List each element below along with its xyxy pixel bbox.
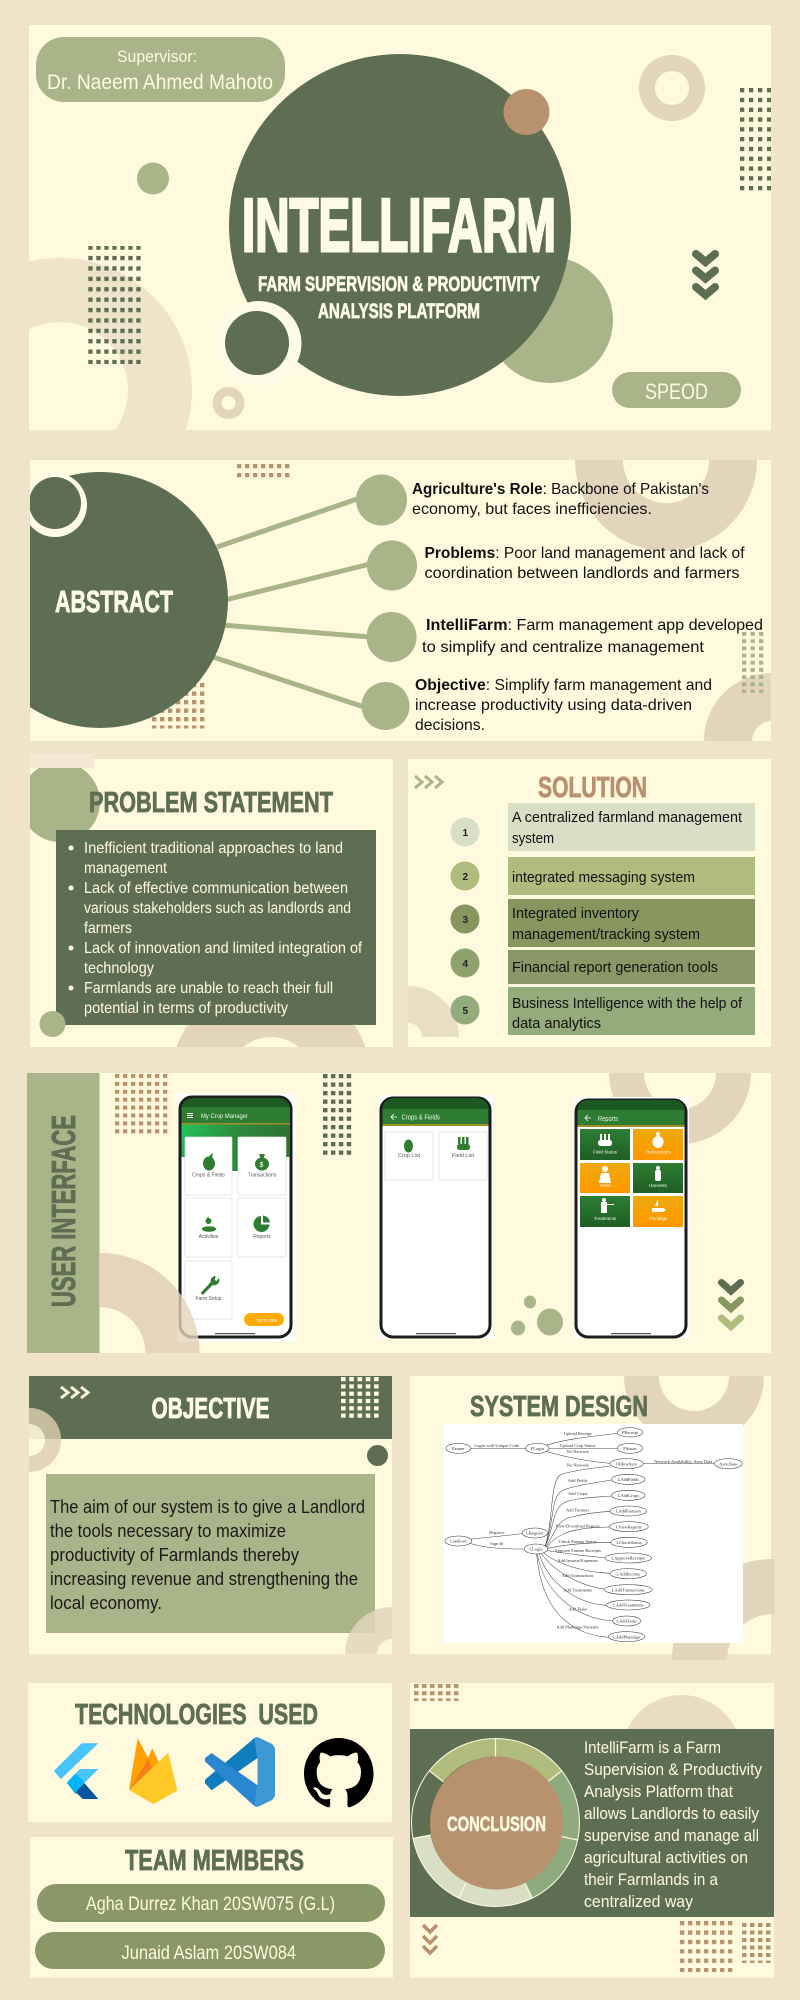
- abstract heading: ABSTRACT: [55, 584, 173, 619]
- item 2: integrated messaging system: [512, 869, 695, 886]
- system flow diagram: Upload Receipt: [564, 1431, 592, 1436]
- text: intellifarm: [422, 617, 763, 656]
- system flow diagram: LAddTasks: [616, 1619, 637, 1624]
- abstract circle: [30, 472, 228, 728]
- system flow diagram: Add Crops: [568, 1491, 588, 1496]
- bullet list box: farmers: [84, 920, 132, 937]
- item 3: [450, 899, 755, 947]
- system flow diagram: Add Plantings/Varieties: [556, 1625, 599, 1630]
- text: agriculture's role: [412, 481, 709, 518]
- conclusion text: centralized way: [584, 1892, 693, 1911]
- bullet list box: Lack of effective communication between: [84, 880, 348, 897]
- item 1: A centralized farmland management: [512, 809, 743, 826]
- text: agriculture's role: economy, but faces inefficiencies.: [412, 501, 652, 518]
- system flow diagram: OfflineSync: [616, 1461, 638, 1466]
- item 2: 2: [462, 872, 468, 883]
- system flow diagram: LAddFarmers: [616, 1509, 641, 1514]
- chevrons: [415, 776, 442, 788]
- chevrons: [696, 254, 715, 295]
- sage dots cluster: [511, 1296, 563, 1336]
- system flow diagram: LRegister: [526, 1531, 544, 1536]
- system flow diagram: LAddCrops: [618, 1493, 639, 1498]
- bullet list box: Lack of innovation and limited integration of: [84, 940, 363, 957]
- panel: abstract: [30, 460, 771, 741]
- objective text box: [46, 1474, 375, 1633]
- subtitle: ANALYSIS PLATFORM: [318, 300, 480, 323]
- item 5: data analytics: [512, 1015, 601, 1032]
- text: problems: [424, 545, 745, 582]
- heading: SYSTEM DESIGN: [470, 1391, 648, 1423]
- item 3: management/tracking system: [512, 926, 700, 943]
- system flow diagram: Approve Farmer Receipts: [554, 1548, 601, 1553]
- conclusion text: agricultural activities on: [584, 1848, 748, 1867]
- system flow diagram: Add Fields: [568, 1478, 588, 1483]
- system flow diagram: LAddPlantings: [613, 1634, 640, 1639]
- ringed dark circle: [216, 301, 302, 386]
- phone 3: reports: Transactions: [645, 1150, 672, 1154]
- phone 1: my crop manager: My Crop Manager: [201, 1113, 249, 1120]
- dark oval: [367, 1445, 388, 1466]
- phone 3: reports: Harvests: [649, 1183, 668, 1188]
- bullet list box: various stakeholders such as landlords and: [84, 900, 351, 917]
- system flow diagram: Sign In: [490, 1541, 504, 1546]
- system flow diagram: No Network: [567, 1462, 590, 1467]
- item 1: system: [512, 830, 554, 847]
- phone 1: my crop manager: $: [260, 1162, 264, 1169]
- system flow diagram: Network Availability, Sync Data: [654, 1459, 712, 1465]
- tan arch over phone: [99, 1253, 199, 1342]
- side strip with vertical heading: [27, 1073, 100, 1353]
- system flow diagram: LAddTreatments: [613, 1603, 644, 1608]
- phone 3: reports: Field Status: [593, 1150, 618, 1154]
- item 5: 5: [462, 1006, 468, 1017]
- conclusion text: IntelliFarm is a Farm: [584, 1738, 721, 1757]
- objective text box: local economy.: [50, 1593, 162, 1613]
- panel: team members: [30, 1837, 393, 1978]
- phone 3: reports: Reports: [598, 1116, 618, 1123]
- icon: vs code: [205, 1737, 275, 1807]
- panel: technologies used: [28, 1683, 392, 1822]
- item 1: [450, 803, 755, 851]
- conclusion heading: CONCLUSION: [447, 1813, 546, 1836]
- panel: objective: [29, 1376, 392, 1654]
- phone 3: reports: Tasks: [599, 1183, 611, 1188]
- item 4: 4: [462, 959, 468, 970]
- connector lines: [213, 498, 370, 707]
- system flow diagram: LLogin: [529, 1547, 543, 1552]
- panel: user interface: [27, 1073, 771, 1353]
- item 4: Financial report generation tools: [512, 959, 718, 976]
- phone 2: crops and fields: Field List: [452, 1153, 474, 1159]
- conclusion text: supervise and manage all: [584, 1826, 759, 1845]
- diagram image area: [444, 1424, 743, 1643]
- conclusion text: Analysis Platform that: [584, 1782, 733, 1801]
- system flow diagram: Add Transactions: [562, 1573, 594, 1578]
- system flow diagram: Add Income/Expenses: [557, 1558, 598, 1563]
- phone 1: my crop manager: Reports: [253, 1234, 271, 1240]
- phone 1: my crop manager: [177, 1093, 296, 1342]
- system flow diagram: LAddFields: [618, 1477, 639, 1482]
- text: intellifarm: to simplify and centralize management: [422, 639, 705, 656]
- chevrons: [722, 1282, 740, 1326]
- phone 1: my crop manager: Crops & Fields: [192, 1172, 225, 1178]
- system flow diagram: Check Farmer Status: [559, 1539, 597, 1544]
- system flow diagram: Add Tasks: [568, 1607, 587, 1612]
- sage corner circle: [30, 768, 100, 842]
- small sage circle: [137, 162, 169, 194]
- item 3: Integrated inventory: [512, 905, 639, 922]
- text: objective: [415, 677, 712, 734]
- objective text box: increasing revenue and strengthening the: [50, 1569, 358, 1589]
- panel: problem statement: [30, 759, 393, 1047]
- system flow diagram: [445, 1428, 742, 1642]
- side strip with vertical heading: USER INTERFACE: [45, 1115, 82, 1307]
- phone 2: crops and fields: [378, 1095, 493, 1339]
- system flow diagram: SyncData: [720, 1461, 737, 1466]
- panel: conclusion: [410, 1683, 774, 1978]
- conclusion text: Supervision & Productivity: [584, 1760, 762, 1779]
- objective text box: The aim of our system is to give a Landlord: [50, 1497, 365, 1517]
- system flow diagram: Login with Unique Code: [474, 1443, 519, 1448]
- system flow diagram: FLogin: [531, 1446, 545, 1451]
- subtitle: FARM SUPERVISION & PRODUCTIVITY: [258, 273, 540, 296]
- heading: TECHNOLOGIES USED: [75, 1699, 318, 1731]
- text: objective: Objective: Simplify farm management and: [415, 677, 712, 694]
- text: agriculture's role: Agriculture's Role: Backbone of Pakistan's: [412, 481, 709, 498]
- item 5: Business Intelligence with the help of: [512, 995, 743, 1012]
- tan circle: [504, 89, 550, 135]
- SPEOD pill: [612, 372, 741, 408]
- bullet list box: [56, 830, 376, 1025]
- decorative ring top right: [647, 63, 697, 113]
- system flow diagram: No Network: [567, 1449, 590, 1454]
- SPEOD pill: SPEOD: [645, 379, 708, 404]
- item 2: [450, 857, 755, 895]
- icon: github: [304, 1738, 374, 1807]
- conclusion text: allows Landlords to easily: [584, 1804, 759, 1823]
- tan ring: [29, 1408, 61, 1472]
- supervisor pill: Supervisor:: [117, 47, 197, 66]
- member pill 1: Agha Durrez Khan 20SW075 (G.L): [86, 1894, 335, 1915]
- system flow diagram: LViewReports: [616, 1524, 642, 1529]
- icon: firebase: [129, 1738, 177, 1804]
- sage circle behind main: [487, 257, 613, 383]
- system flow diagram: LCheckStatus: [616, 1540, 642, 1545]
- bullet list box: management: [84, 860, 168, 877]
- objective text box: productivity of Farmlands thereby: [50, 1545, 299, 1565]
- subtitle: [258, 273, 540, 323]
- node circles: [356, 474, 417, 730]
- small sage circle: [40, 1011, 66, 1037]
- bullet list box: Inefficient traditional approaches to land: [84, 840, 343, 857]
- system flow diagram: LApproveReceipts: [611, 1556, 646, 1561]
- member pill 2: Junaid Aslam 20SW084: [122, 1943, 296, 1964]
- phone 1: my crop manager: Farm Setup: [195, 1296, 222, 1302]
- system flow diagram: FReceipt: [622, 1430, 639, 1435]
- bullet list box: potential in terms of productivity: [84, 1000, 288, 1017]
- conclusion text: [584, 1738, 762, 1911]
- header band: [29, 1376, 392, 1439]
- system flow diagram: Landlord: [450, 1539, 467, 1544]
- chevrons: [423, 1925, 437, 1953]
- system flow diagram: LAddIncome: [616, 1571, 640, 1576]
- system flow diagram: View/Download Reports: [555, 1524, 600, 1529]
- panel: solution: [408, 759, 771, 1047]
- bullet list box: technology: [84, 960, 154, 977]
- dark band: [410, 1729, 774, 1917]
- item 3: 3: [462, 915, 468, 926]
- conclusion text: their Farmlands in a: [584, 1870, 718, 1889]
- phone 3: reports: Treatments: [594, 1216, 617, 1221]
- segmented ring: [412, 1738, 580, 1906]
- heading: SOLUTION: [538, 772, 647, 804]
- system flow diagram: Add Farmers: [566, 1508, 590, 1513]
- item 4: [450, 948, 755, 984]
- panel: system design: [410, 1376, 775, 1660]
- text: problems: coordination between landlords and farmers: [424, 565, 740, 582]
- heading: TEAM MEMBERS: [125, 1845, 304, 1877]
- item 1: 1: [462, 828, 468, 839]
- system flow diagram: Add Treatments: [563, 1588, 592, 1593]
- text: intellifarm: IntelliFarm: Farm management app developed: [426, 617, 763, 634]
- system flow diagram: LAddTransactions: [612, 1587, 645, 1592]
- heading: PROBLEM STATEMENT: [89, 787, 333, 819]
- text: objective: decisions.: [415, 717, 485, 734]
- small tan ring: [217, 392, 240, 414]
- system flow diagram: FStatus: [623, 1446, 637, 1451]
- supervisor pill: Dr. Naeem Ahmed Mahoto: [47, 71, 273, 94]
- bullet list box: Farmlands are unable to reach their full: [84, 980, 333, 997]
- phone 1: my crop manager: Transactions: [248, 1172, 277, 1178]
- phone 2: crops and fields: Crops & Fields: [402, 1114, 440, 1122]
- title: INTELLIFARM: [242, 183, 556, 267]
- phone 2: crops and fields: Crop List: [398, 1153, 420, 1159]
- supervisor pill: [36, 37, 285, 102]
- panel: hero title: [29, 25, 771, 430]
- system flow diagram: Farmer: [452, 1446, 465, 1451]
- member pill 2: [35, 1932, 385, 1969]
- text: problems: Problems: Poor land management and lack of: [424, 545, 745, 562]
- phone 1: my crop manager: Activities: [199, 1234, 219, 1240]
- icon: flutter: [54, 1743, 98, 1799]
- objective text box: the tools necessary to maximize: [50, 1521, 286, 1541]
- center tan circle: [430, 1756, 563, 1890]
- text: objective: increase productivity using data-driven: [415, 697, 692, 714]
- item 5: [450, 987, 755, 1035]
- phone 3: reports: [574, 1097, 689, 1339]
- phone 3: reports: Plantings: [649, 1216, 668, 1221]
- header band: OBJECTIVE: [152, 1393, 270, 1425]
- main dark circle: [229, 54, 571, 396]
- system flow diagram: Register: [489, 1530, 505, 1535]
- phone 1: my crop manager: Sync data: [257, 1318, 278, 1322]
- tan arch: [345, 1607, 392, 1654]
- system flow diagram: Upload Crop Status: [560, 1443, 596, 1448]
- member pill 1: [37, 1884, 385, 1922]
